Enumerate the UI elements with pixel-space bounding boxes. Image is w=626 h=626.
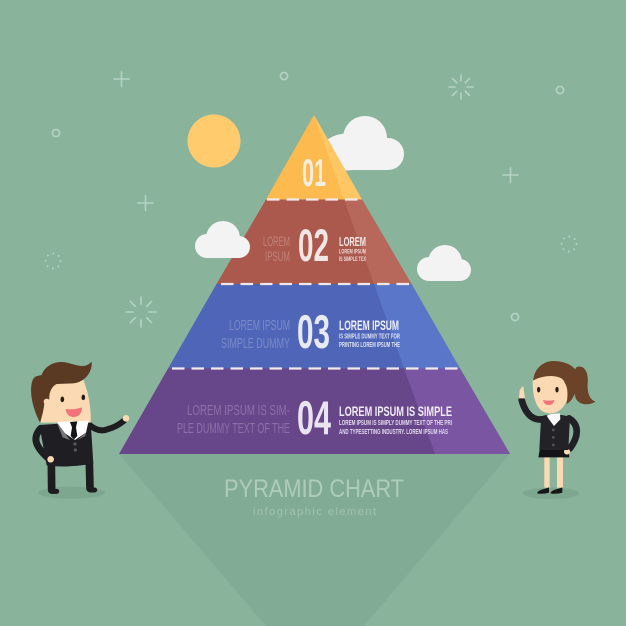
tier 3 band: LOREM IPSUM — [229, 317, 290, 334]
tier 4 band: LOREM IPSUM IS SIMPLY DUMMY TEXT OF THE PRI — [339, 420, 452, 427]
cloud: top right — [321, 116, 404, 170]
tier 3 band — [168, 284, 460, 368]
character: businesswoman — [519, 361, 596, 499]
tier 3 band: SIMPLE DUMMY — [221, 335, 290, 352]
tier 4 band — [119, 368, 510, 454]
tier 4 band: 04 — [297, 391, 331, 444]
tier 4 band: PLE DUMMY TEXT OF THE — [177, 420, 290, 437]
tier 4 band: LOREM IPSUM IS SIM- — [187, 402, 290, 419]
tier 4 band: LOREM IPSUM IS SIMPLE — [339, 403, 452, 419]
subtitle: infographic element: infographic element — [253, 506, 376, 518]
tier 2 band: IPSUM — [265, 248, 290, 264]
pyramid reflection shadow — [119, 454, 510, 626]
tier 3 band: 03 — [297, 305, 330, 358]
character: businessman — [31, 362, 129, 499]
tier 2 band — [216, 200, 412, 284]
title: pyramid chart: PYRAMID CHART — [224, 475, 404, 503]
tier 2 band: IS SIMPLE TEX — [339, 257, 366, 263]
decorative sparkles — [46, 72, 576, 327]
sun — [188, 114, 240, 168]
tier 2 band: LOREM — [263, 233, 290, 249]
pyramid chart — [119, 115, 510, 454]
tier 3 band: IS SIMPLE DUMMY TEXT FOR — [339, 334, 400, 340]
tier 4 band: AND TYPESETTING INDUSTRY. LOREM IPSUM HAS — [339, 429, 448, 436]
tier 2 band: 02 — [298, 220, 329, 271]
tier 3 band: PRINTING LOREM IPSUM THE — [339, 342, 400, 349]
cloud: middle left — [195, 221, 250, 258]
cloud: middle right — [417, 245, 471, 281]
tier 1 band: 01 — [302, 152, 326, 195]
tier 1 band — [266, 115, 362, 200]
tier 2 band: LOREM — [339, 234, 366, 249]
tier 3 band: LOREM IPSUM — [339, 317, 399, 333]
dashed tier dividers — [172, 200, 458, 368]
tier 2 band: LOREM IPSUM — [339, 250, 366, 256]
